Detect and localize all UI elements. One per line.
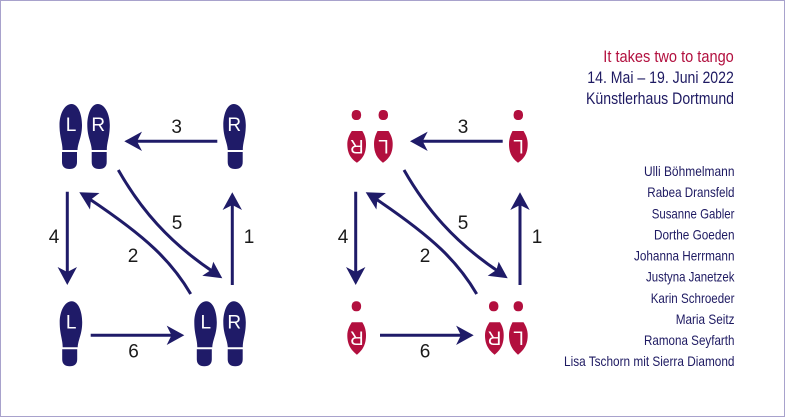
arrow 4 bbox=[49, 192, 77, 285]
arrow 3: 3 bbox=[171, 117, 182, 138]
arrow 5 bbox=[118, 170, 222, 278]
icon: red shoe R bottom right: R bbox=[488, 326, 501, 347]
heading: exhibition title, dates and venue bbox=[586, 48, 734, 108]
arrow 5: 5 bbox=[458, 213, 468, 234]
icon: shoe L bottom right: L bbox=[201, 312, 211, 333]
arrow 4: 4 bbox=[49, 227, 60, 248]
icon: red shoe R bottom left: R bbox=[350, 326, 364, 347]
arrow 3: 3 bbox=[458, 117, 468, 138]
title: It takes two to tango bbox=[603, 48, 734, 66]
arrow 4: 4 bbox=[338, 227, 349, 248]
icon: shoe R top left: R bbox=[91, 115, 105, 136]
text block: artist names: Rabea Dransfeld bbox=[647, 184, 734, 200]
icon: shoe R top right: R bbox=[227, 115, 241, 136]
text block: artist names: Karin Schroeder bbox=[651, 290, 735, 306]
arrow 3 bbox=[124, 117, 217, 151]
venue: Künstlerhaus Dortmund bbox=[586, 90, 734, 108]
text block: artist names: Susanne Gabler bbox=[652, 206, 735, 222]
icon: red shoe R top left: R bbox=[350, 135, 364, 156]
panel: leader steps diagram bbox=[49, 104, 254, 366]
arrow 5: 5 bbox=[172, 213, 182, 234]
icon: shoe R bottom right: R bbox=[227, 312, 241, 333]
icon: red shoe L top middle bbox=[374, 110, 393, 163]
text block: artist names: Lisa Tschorn mit Sierra Diamond bbox=[564, 353, 734, 369]
icon: shoe R top right bbox=[223, 104, 246, 169]
text block: artist names bbox=[564, 163, 735, 369]
icon: shoe L bottom left bbox=[60, 301, 82, 366]
icon: red shoe L top middle: L bbox=[378, 135, 389, 156]
arrow 1: 1 bbox=[532, 227, 542, 248]
arrow 6: 6 bbox=[128, 342, 139, 363]
arrow 2 bbox=[366, 192, 477, 294]
icon: red shoe R top left bbox=[347, 110, 366, 163]
panel: follower steps diagram bbox=[338, 110, 542, 363]
arrow 6 bbox=[91, 326, 184, 363]
icon: red shoe L bottom right: L bbox=[513, 326, 524, 347]
icon: shoe L top left: L bbox=[66, 115, 76, 136]
arrow 1 bbox=[510, 192, 542, 285]
arrow 1: 1 bbox=[244, 227, 254, 248]
arrow 6: 6 bbox=[420, 342, 430, 363]
arrow 2: 2 bbox=[128, 246, 138, 267]
arrow 2 bbox=[79, 192, 191, 294]
icon: red shoe R bottom left bbox=[347, 301, 366, 355]
icon: shoe R top left bbox=[87, 104, 110, 169]
text block: artist names: Ulli Böhmelmann bbox=[644, 163, 734, 179]
arrow 4 bbox=[338, 192, 365, 285]
icon: shoe L bottom left: L bbox=[66, 312, 76, 333]
arrow 2: 2 bbox=[420, 246, 430, 267]
text block: artist names: Ramona Seyfarth bbox=[644, 332, 734, 348]
text block: artist names: Johanna Herrmann bbox=[634, 248, 734, 264]
text block: artist names: Justyna Janetzek bbox=[646, 268, 735, 284]
icon: red shoe L top right bbox=[509, 110, 528, 163]
text block: artist names: Maria Seitz bbox=[676, 311, 734, 327]
icon: shoe L bottom right bbox=[194, 301, 217, 366]
arrow 1 bbox=[223, 192, 254, 285]
arrow 6 bbox=[380, 326, 474, 363]
icon: shoe L top left bbox=[60, 104, 82, 169]
text block: artist names: Dorthe Goeden bbox=[654, 226, 734, 242]
arrow 3 bbox=[410, 117, 503, 151]
icon: shoe R bottom right bbox=[223, 301, 246, 366]
icon: red shoe L top right: L bbox=[513, 135, 524, 156]
arrow 5 bbox=[404, 170, 508, 278]
icon: red shoe L bottom right bbox=[509, 301, 528, 355]
icon: red shoe R bottom right bbox=[485, 301, 504, 355]
dates: 14. Mai – 19. Juni 2022 bbox=[587, 69, 734, 87]
